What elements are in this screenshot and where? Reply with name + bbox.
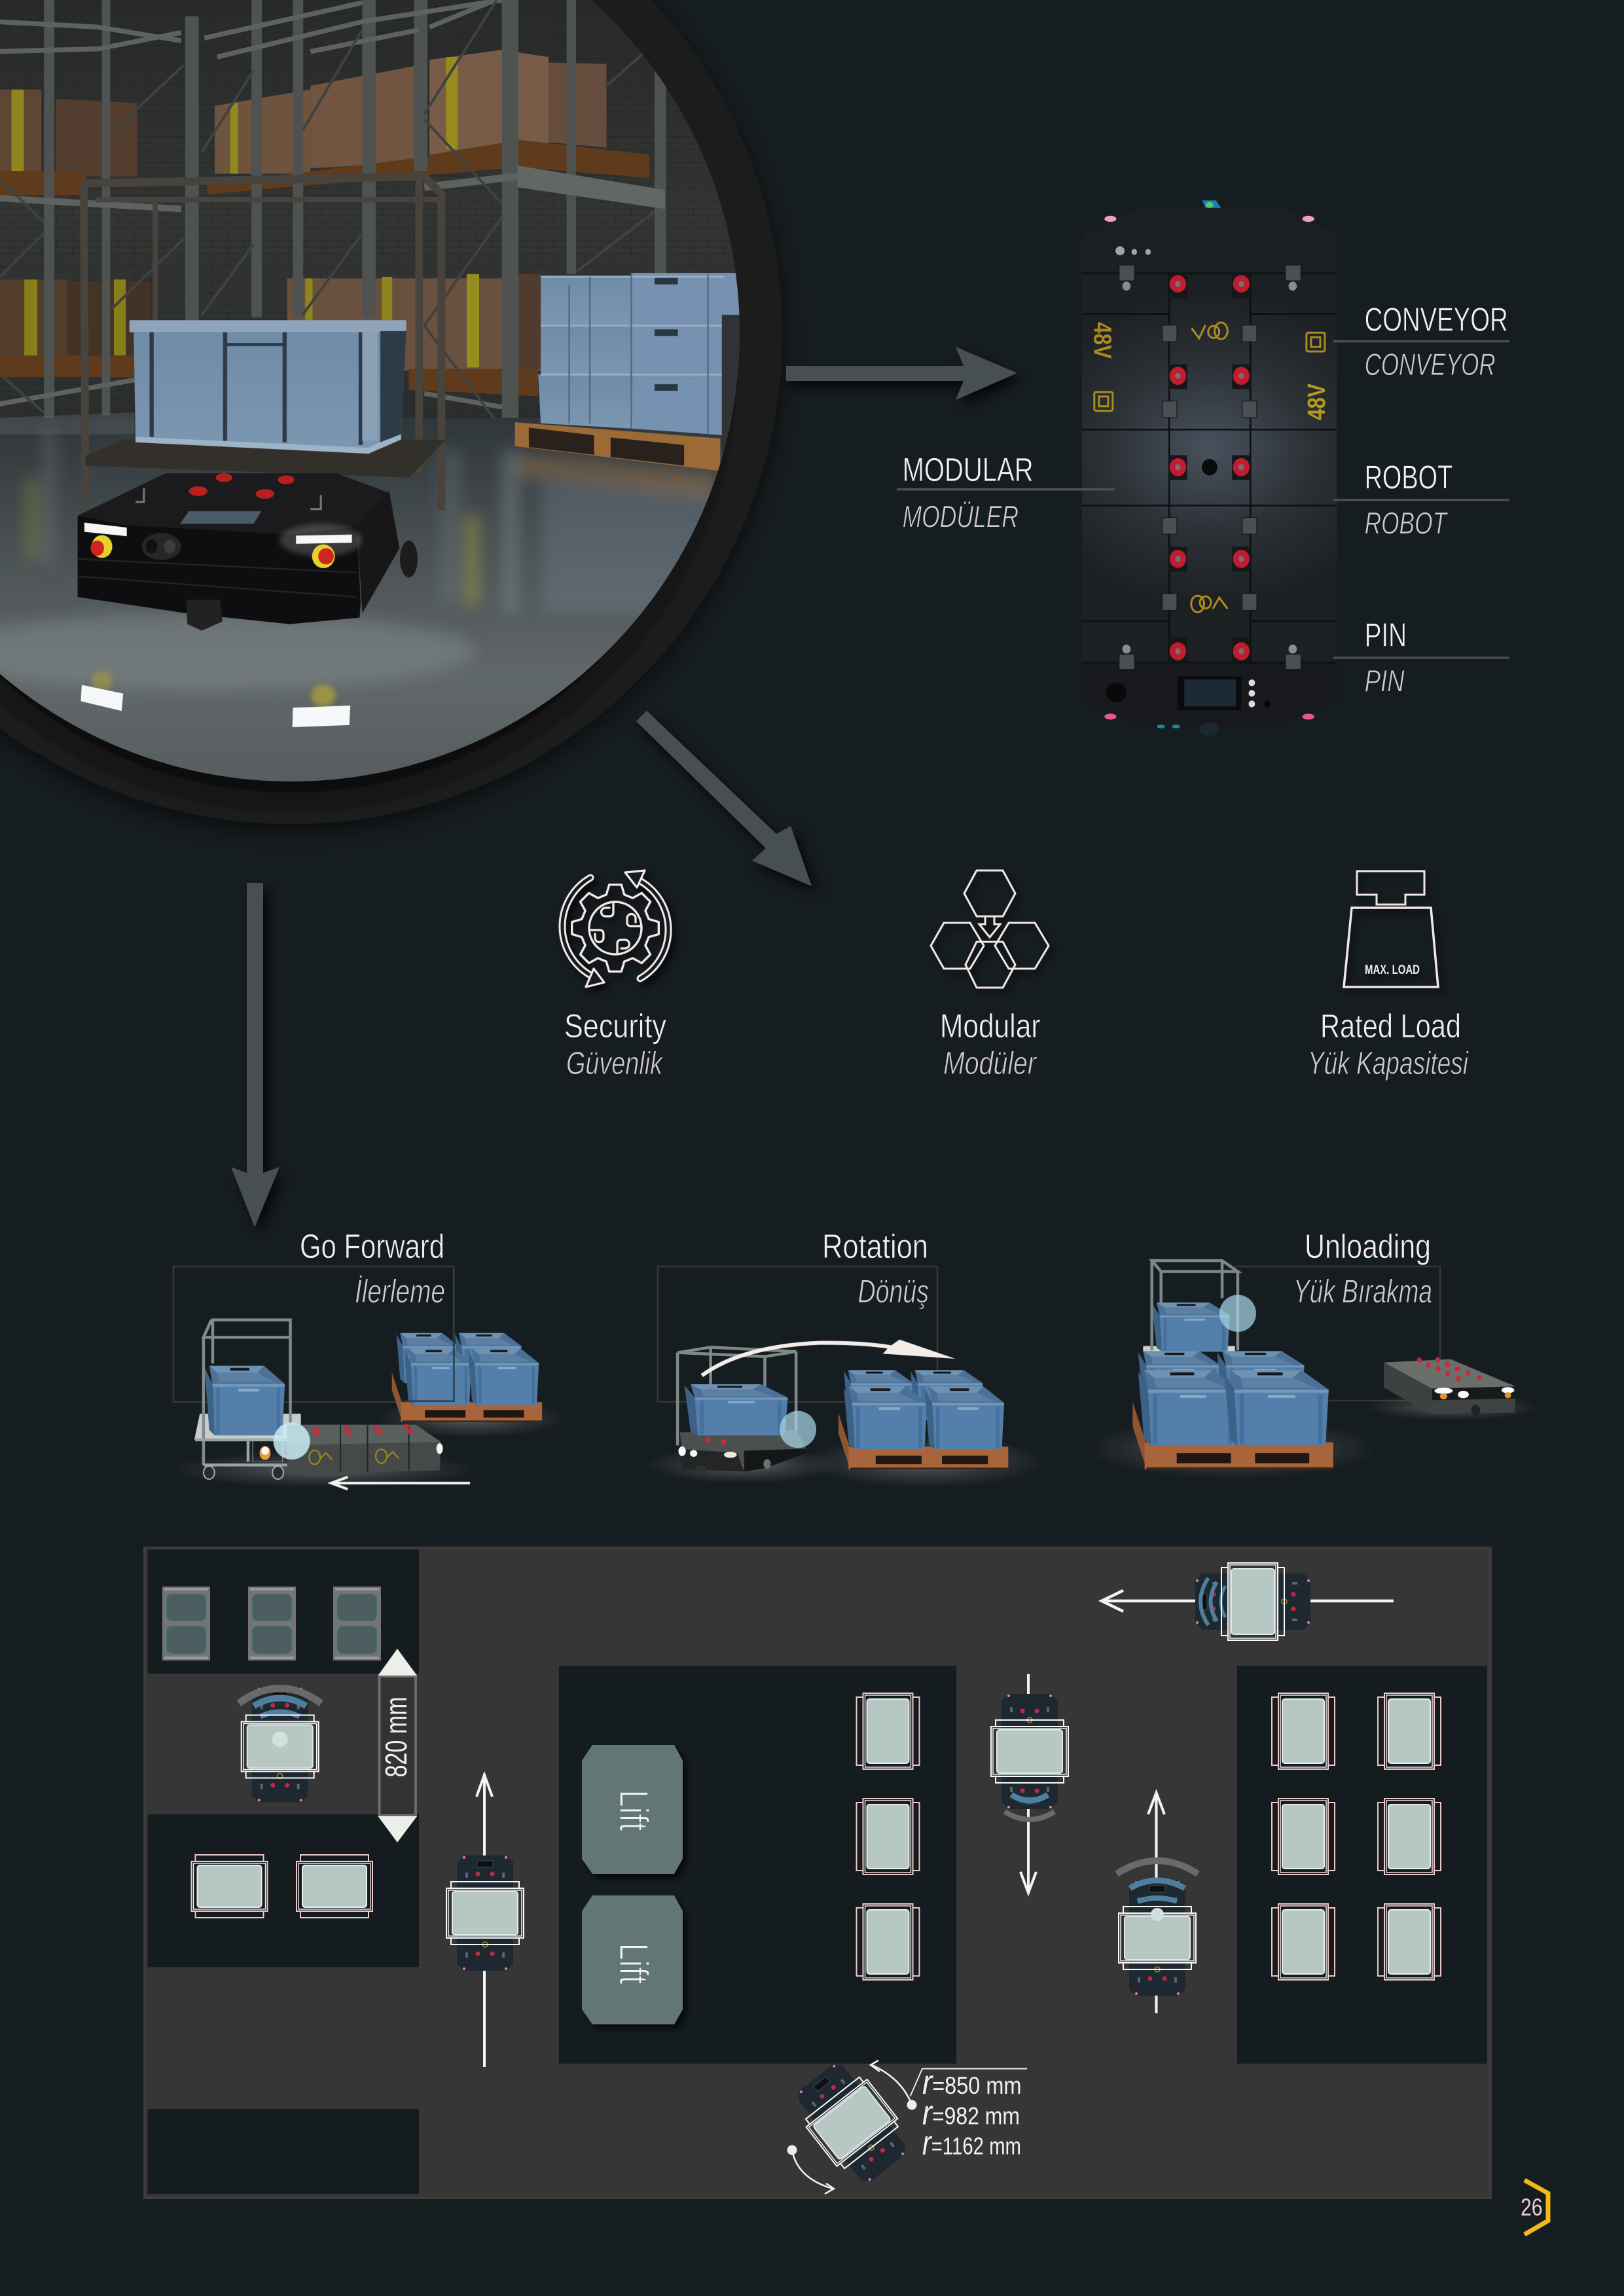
upper cartons [0,50,606,370]
steel racking [0,0,666,445]
label: robot: ROBOT [1365,505,1449,540]
label: pin: PIN [1365,664,1405,698]
cart with crate [1143,1261,1238,1352]
travel arrow [1020,1674,1036,1893]
icon: gear with rotation arrows [562,870,668,987]
robot carrying cart: centre-left aisle [446,1774,524,2067]
panel frame [658,1266,937,1402]
pallet with crates [392,1333,542,1422]
control display [1106,677,1271,710]
label: modular [897,451,1115,534]
feature: rated load [1308,871,1469,1081]
curved motion arrow [702,1340,956,1376]
heading: İlerleme [355,1273,445,1310]
crate on cart [130,320,406,454]
label: pin: PIN [1365,617,1407,654]
corner LEDs [1104,200,1314,736]
circular frame ring [0,0,782,824]
turning radius labels: r=982 mm [922,2094,1020,2132]
rated load labels: Rated Load [1320,1007,1461,1045]
panel frame [173,1266,454,1402]
sensor beam [780,1411,816,1448]
illustration [1085,1261,1540,1479]
rated load labels [1308,1007,1469,1081]
page number [1521,2180,1548,2234]
cart and crate [677,1347,796,1462]
centre sensor [1202,459,1218,475]
robot body [1082,208,1337,726]
label: conveyor: CONVEYOR [1365,347,1496,382]
robot carrying cart: left aisle [239,1687,321,1803]
48V marks: 48V [1089,322,1116,359]
label: conveyor: CONVEYOR [1365,301,1508,338]
lift 1: Lift [611,1789,656,1831]
lift 2 [582,1895,683,2024]
travel arrow [1148,1793,1164,2013]
label: robot: ROBOT [1365,459,1453,496]
bottom logo [1191,596,1227,612]
floor pallet [515,422,720,471]
battery icons [1094,332,1325,411]
robot turning in place [786,2054,918,2194]
heading [1293,1228,1432,1310]
robot carrying cart: top corridor [1102,1563,1394,1640]
panel frame [1235,1266,1440,1401]
hero: circular warehouse photo [0,0,802,824]
pallet with crates [839,1370,1008,1469]
floor reflections [0,429,717,689]
label: modular: MODÜLER [903,499,1019,534]
robot carrying cart: descending aisle [991,1674,1068,1893]
label: robot [1333,459,1509,540]
top logo [1192,323,1227,339]
indicator lamps [1115,246,1151,255]
direction arrow [331,1477,470,1489]
robot top view [1082,200,1337,736]
turning radius labels: r=1162 mm [922,2125,1021,2162]
red pins [1168,275,1250,662]
heading: Unloading [1305,1228,1431,1266]
motion: go forward [168,1228,568,1489]
heading [300,1228,445,1310]
feature: modular [931,870,1049,1081]
arrow: photo to features [636,711,812,886]
lift blocks [582,1745,683,2024]
heading: Go Forward [300,1228,444,1266]
panel seams [1082,274,1337,662]
stored carts: left zone [191,1855,372,1918]
label: modular: MODULAR [903,451,1034,488]
label: conveyor [1333,301,1509,382]
top and bottom caps [1082,208,1337,726]
blue crate stacks [538,273,740,450]
feature: security [562,870,668,1081]
heading: Yük Bırakma [1293,1273,1432,1310]
heading [822,1228,929,1310]
robot [253,1424,443,1475]
stored carts: centre zone [856,1693,919,1980]
sensor beam [274,1422,310,1460]
travel arrow [477,1774,492,2067]
turning radius labels [910,2064,1027,2162]
modular labels: Modular [940,1007,1041,1045]
turning arrow upper [871,2060,912,2105]
security labels [564,1007,666,1081]
turning arrow lower [792,2150,834,2194]
page number: 26 [1521,2194,1542,2221]
illustration [168,1266,568,1489]
security labels: Security [564,1007,666,1045]
icon: hexagons [931,870,1049,988]
latch screws [1123,281,1297,653]
icon: weight [1344,871,1438,987]
modular labels: Modüler [943,1046,1037,1081]
motion: rotation [645,1228,1045,1488]
turning radius labels: r=850 mm [922,2064,1021,2102]
icon: weight: MAX. LOAD [1365,963,1420,977]
heading: Rotation [822,1228,928,1266]
floor [145,1548,1490,2198]
48V marks [1089,322,1331,420]
sensor beam [1219,1295,1256,1332]
dimension: 820 mm [378,1649,417,1842]
dimension: 820 mm: 820 mm [379,1696,413,1778]
lift 1 [582,1745,683,1874]
stored carts: right zone [1272,1693,1441,1980]
48V marks: 48V [1303,383,1331,420]
wooden pallets on shelves [0,140,649,396]
label: pin [1333,617,1509,698]
floor plan [145,1548,1490,2198]
travel arrow [1102,1590,1394,1611]
pallet racks [162,1587,381,1660]
hinges [1119,265,1301,670]
cart with crate [194,1320,301,1479]
pallet with crates [1132,1351,1333,1469]
illustration [645,1340,1045,1488]
motion: unloading [1085,1228,1540,1479]
rusty cart frame [84,176,444,510]
arrow: photo to motions [231,883,280,1227]
polished floor [0,418,727,781]
modular labels [940,1007,1041,1081]
dark zones [148,1550,1487,2194]
security labels: Güvenlik [566,1046,664,1081]
rated load labels: Yük Kapasitesi [1308,1046,1469,1081]
arrow: photo to top view [786,347,1017,400]
warehouse scene [0,0,740,781]
heading: Dönüş [857,1273,929,1310]
robot carrying cart: ascending aisle [1117,1793,1198,2013]
lift 2: Lift [611,1943,656,1984]
robot [1384,1357,1516,1416]
robot AGV in photo [78,473,418,631]
robot light reflections [81,671,350,727]
robot [677,1384,806,1476]
